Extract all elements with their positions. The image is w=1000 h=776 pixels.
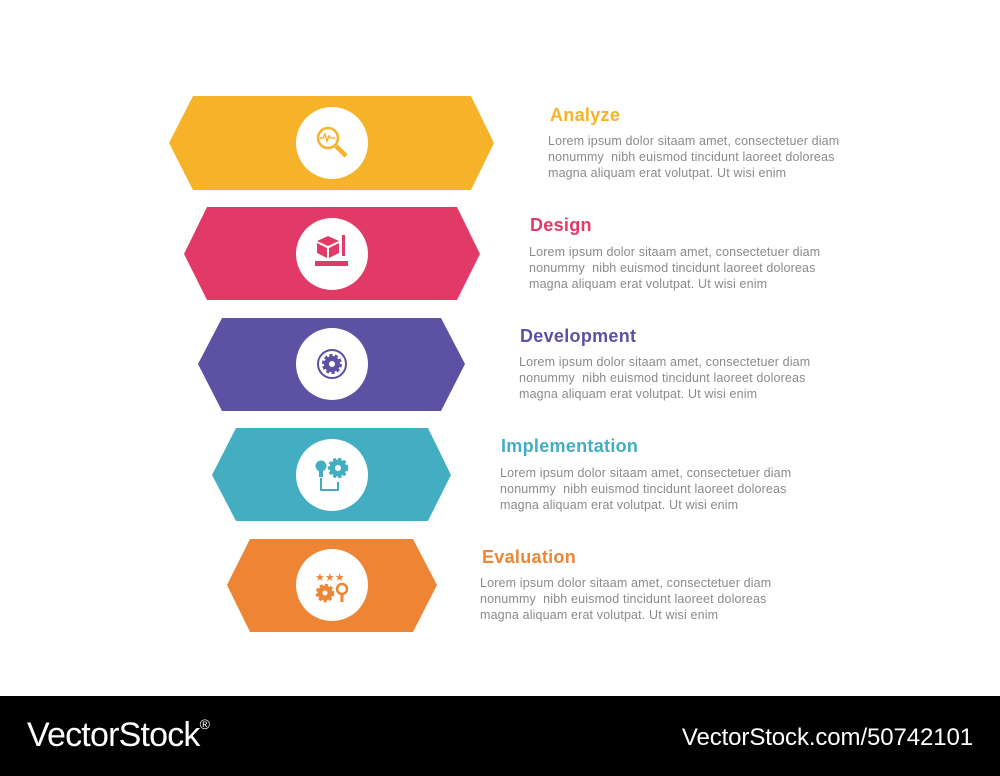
step 1 analyze hexagon (169, 96, 494, 190)
text: nonummy nibh euismod tincidunt laoreet doloreas (548, 150, 835, 164)
icon: bulb and gear (316, 460, 346, 490)
step 2 design hexagon (184, 207, 480, 300)
text: Analyze (550, 105, 620, 125)
footer logo: VectorStock® (27, 716, 209, 754)
step 4 implementation hexagon (212, 428, 451, 521)
step 5 evaluation hexagon (227, 539, 437, 632)
text: implementation (500, 436, 791, 512)
text: nonummy nibh euismod tincidunt laoreet doloreas (480, 592, 767, 606)
footer bar (0, 696, 1000, 776)
text: nonummy nibh euismod tincidunt laoreet doloreas (500, 482, 787, 496)
text: Lorem ipsum dolor sitaam amet, consectetuer diam (480, 576, 771, 590)
step 3 development hexagon (198, 318, 465, 411)
text: Lorem ipsum dolor sitaam amet, consectetuer diam (529, 245, 820, 259)
text: magna aliquam erat volutpat. Ut wisi enim (548, 166, 786, 180)
footer id: VectorStock.com/50742101 (682, 724, 973, 751)
icon: gear cycle (318, 350, 346, 378)
text: Development (520, 326, 636, 346)
text: analyze (548, 105, 839, 180)
icon: stars gear magnifier (315, 572, 347, 602)
text: magna aliquam erat volutpat. Ut wisi enim (480, 608, 718, 622)
text: magna aliquam erat volutpat. Ut wisi enim (519, 387, 757, 401)
text: Lorem ipsum dolor sitaam amet, consectetuer diam (519, 355, 810, 369)
text: development (519, 326, 810, 401)
icon: stars gear magnifier: ★★★ (315, 572, 345, 584)
text: nonummy nibh euismod tincidunt laoreet doloreas (529, 261, 816, 275)
text: Lorem ipsum dolor sitaam amet, consectetuer diam (548, 134, 839, 148)
text: Lorem ipsum dolor sitaam amet, consectetuer diam (500, 466, 791, 480)
icon: magnifier (318, 128, 346, 156)
text: Implementation (501, 436, 638, 456)
icon: cube and ruler (315, 235, 348, 266)
text: magna aliquam erat volutpat. Ut wisi enim (500, 498, 738, 512)
text: Evaluation (482, 547, 576, 567)
text: evaluation (480, 547, 771, 622)
text: Design (530, 215, 592, 235)
text: design (529, 215, 820, 291)
text: nonummy nibh euismod tincidunt laoreet doloreas (519, 371, 806, 385)
text: magna aliquam erat volutpat. Ut wisi enim (529, 277, 767, 291)
